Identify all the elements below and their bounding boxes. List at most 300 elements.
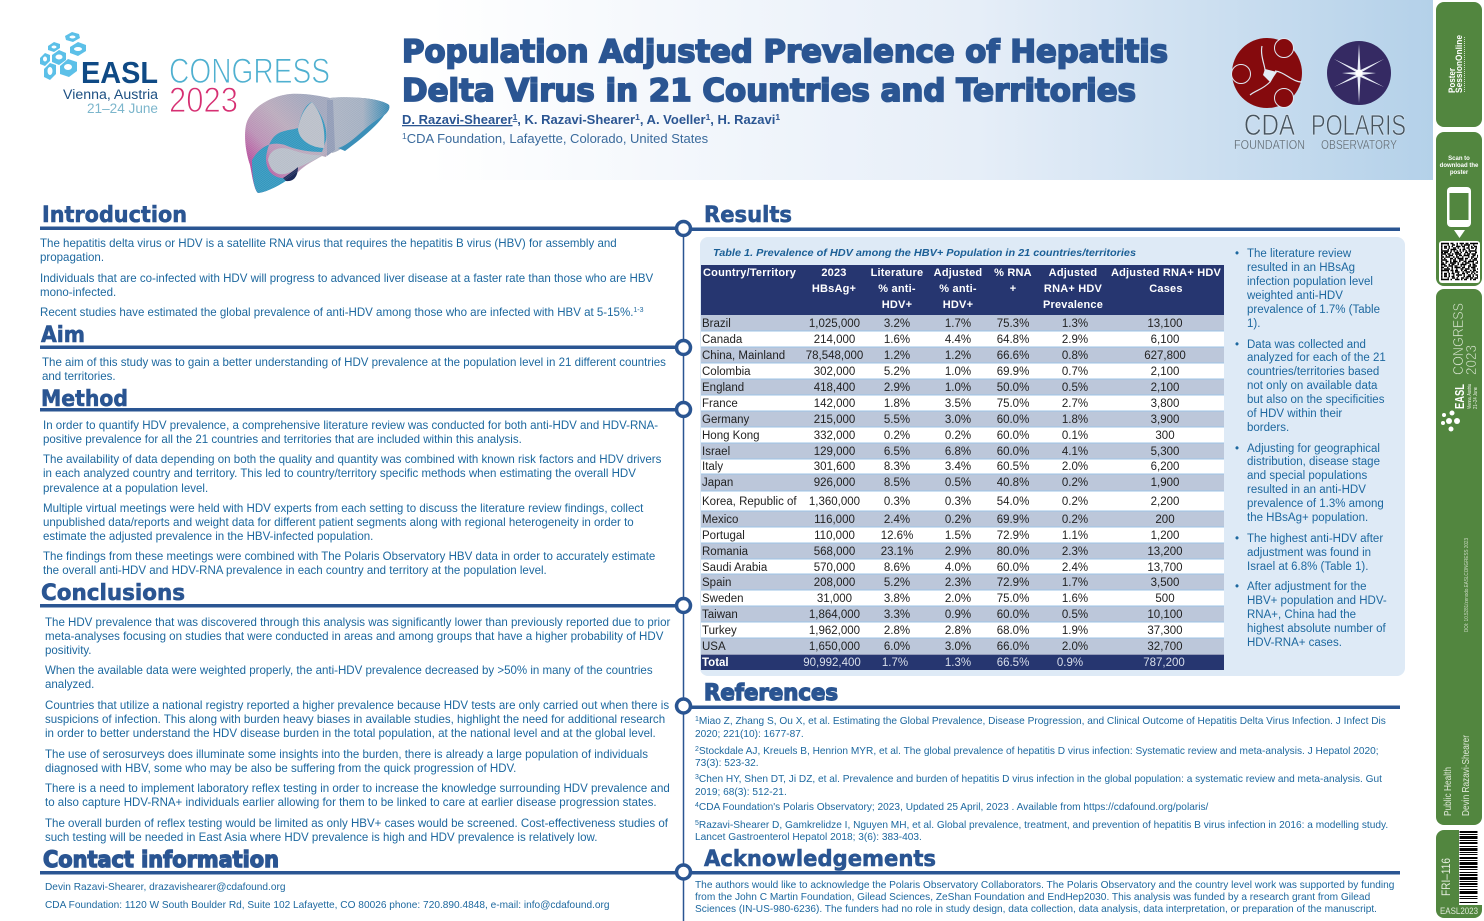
table body: 1.6% <box>1062 593 1088 605</box>
table body: 31,000 <box>817 593 852 605</box>
text block: method: The findings from these meetings were combined with The Polaris Observatory HBV data in order to accurately estimate <box>43 551 655 563</box>
affiliation: 1 <box>402 131 407 141</box>
table body: 110,000 <box>814 530 855 542</box>
table body: 60.0% <box>997 446 1029 458</box>
table body: 2.8% <box>884 625 910 637</box>
table body: 3.2% <box>884 318 910 330</box>
table body: 500 <box>1155 593 1175 605</box>
table body: 2.8% <box>945 625 971 637</box>
table body: 0.9% <box>945 609 971 621</box>
table body: 0.1% <box>1062 430 1088 442</box>
table body: 1.8% <box>1062 414 1088 426</box>
icon: liver illustration <box>245 94 389 193</box>
table body: 66.0% <box>997 641 1029 653</box>
table body: 3.0% <box>945 641 971 653</box>
table body: 3,800 <box>1151 398 1179 410</box>
heading: References: References <box>704 681 838 706</box>
sidebar: EASL Congress, track and presenter: Devin Razavi-Shearer <box>1461 734 1472 816</box>
panel: method <box>40 387 676 577</box>
table body: England <box>702 382 744 394</box>
table body: 2.9% <box>945 546 971 558</box>
text block: references: Lancet Gastroenterol Hepatol 2018; 3(6): 383-403. <box>695 832 922 843</box>
table body: 12.6% <box>881 530 913 542</box>
text block: references: 1 <box>695 716 699 723</box>
table body: 10,100 <box>1147 609 1183 621</box>
results key points: • <box>1235 443 1239 455</box>
sidebar: EASL Congress, track and presenter: 21–24 June <box>1473 387 1479 409</box>
table header: HDV+ <box>943 299 973 311</box>
panel: acknowledgements <box>690 847 1400 915</box>
table body: 1.2% <box>884 350 910 362</box>
table total row: 0.9% <box>1057 657 1083 669</box>
table body: 60.0% <box>997 430 1029 442</box>
table body: 568,000 <box>814 546 855 558</box>
title: Delta Virus in 21 Countries and Territories <box>402 73 1136 109</box>
table body: 3,500 <box>1151 577 1179 589</box>
heading: Results: Results <box>704 203 792 228</box>
table body: 1.8% <box>884 398 910 410</box>
header band <box>0 0 1433 180</box>
heading: Contact information: Contact information <box>43 848 279 873</box>
table body: 68.0% <box>997 625 1029 637</box>
results key points: infection population level <box>1247 276 1373 288</box>
logo: Polaris Observatory: OBSERVATORY <box>1321 138 1398 152</box>
table body: 4.0% <box>945 562 971 574</box>
results key points: Adjusting for geographical <box>1247 443 1380 455</box>
table body: 142,000 <box>814 398 855 410</box>
table body: 0.2% <box>1062 477 1088 489</box>
results key points: • <box>1235 248 1239 260</box>
table total row: Total <box>702 657 729 669</box>
table header: Country/Territory <box>703 267 797 279</box>
table body: 1,900 <box>1151 477 1179 489</box>
table body: 60.0% <box>997 414 1029 426</box>
table body: 1.0% <box>945 382 971 394</box>
table body: 1.6% <box>884 334 910 346</box>
table body: 6,200 <box>1151 461 1179 473</box>
text block: conclusions: meta-analyses focusing on studies that were conducted in areas and among groups that have a higher probability of HDV <box>45 631 664 643</box>
logo: Polaris Observatory: POLARIS <box>1311 110 1406 142</box>
table body: 64.8% <box>997 334 1029 346</box>
text block: references: Miao Z, Zhang S, Ou X, et al. Estimating the Global Prevalence, Disease Progression, and Clinical Outcome of Hepatitis Delta Virus Infection. J Infect Dis <box>699 716 1386 727</box>
text block: references: 2020; 221(10): 1677-87. <box>695 729 804 740</box>
text block: method: prevalence at a population level. <box>43 483 208 495</box>
results key points: • <box>1235 339 1239 351</box>
table body: 75.0% <box>997 398 1029 410</box>
table caption: Table 1. Prevalence of HDV among the HBV+ Population in 21 countries/territories <box>713 247 1136 259</box>
heading: Acknowledgements: Acknowledgements <box>704 847 936 872</box>
table body: 1.7% <box>945 318 971 330</box>
table total row: 787,200 <box>1143 657 1185 669</box>
table body: 5.2% <box>884 577 910 589</box>
table body: 1,200 <box>1151 530 1179 542</box>
table body: 3.8% <box>884 593 910 605</box>
panel: aim <box>40 323 676 383</box>
sidebar: EASL Congress, track and presenter: Public Health <box>1443 767 1454 816</box>
table body: 418,400 <box>814 382 855 394</box>
sidebar: EASL Congress, track and presenter: DOI: 10.5281/zenodo.EASLCONGRESS 2023 <box>1464 538 1470 632</box>
table body: 78,548,000 <box>806 350 863 362</box>
table body: 60.5% <box>997 461 1029 473</box>
authors: 1 <box>706 112 711 122</box>
text block: references: Stockdale AJ, Kreuels B, Henrion MYR, et al. The global prevalence of hepatitis D virus infection: Systematic review and meta-analysis. J Hepatol 2020; <box>699 746 1379 757</box>
title <box>402 34 1168 109</box>
logo: Polaris Observatory <box>1311 41 1406 152</box>
text block: conclusions: in order to better understand the HDV disease burden in the total population, at the national level and at the global level. <box>45 728 656 740</box>
table body: 6.5% <box>884 446 910 458</box>
sidebar: QR download: download the <box>1440 163 1479 169</box>
table row stripes <box>701 315 1224 669</box>
logo: EASL Congress: 21–24 June <box>87 101 158 116</box>
results key points: weighted anti-HDV <box>1246 290 1343 302</box>
table header: Adjusted <box>1049 267 1097 279</box>
results key points: borders. <box>1247 422 1289 434</box>
table body: 0.3% <box>884 496 910 508</box>
table body: 69.9% <box>997 514 1029 526</box>
sidebar: poster number and barcode <box>1436 830 1482 918</box>
table header: HBsAg+ <box>812 283 856 295</box>
text block: introduction: 1-3 <box>633 307 644 314</box>
table body: 570,000 <box>814 562 855 574</box>
text block: references: 5 <box>695 820 699 827</box>
table body: 3.3% <box>884 609 910 621</box>
logo: EASL Congress: EASL <box>81 55 158 90</box>
text block: introduction: mono-infected. <box>40 287 116 299</box>
table body: Portugal <box>702 530 745 542</box>
table body: 0.5% <box>1062 609 1088 621</box>
logo: CDA Foundation <box>1232 38 1305 152</box>
table body: 332,000 <box>814 430 855 442</box>
text block: method: unpublished data/reports and weight data for different patient segments along with regional heterogeneity in order to <box>43 517 634 529</box>
table body: 5.2% <box>884 366 910 378</box>
heading: Method: Method <box>41 387 128 412</box>
table body: 0.2% <box>884 430 910 442</box>
table body: 23.1% <box>881 546 913 558</box>
text block: introduction: Individuals that are co-infected with HDV will progress to advanced liver disease at a faster rate than those who are HBV <box>40 273 654 285</box>
text block: aim <box>42 357 666 383</box>
table body: 2.0% <box>945 593 971 605</box>
table body: 2.0% <box>1062 641 1088 653</box>
panel: conclusions <box>40 581 676 844</box>
text block: aim: and territories. <box>42 371 116 383</box>
table body: 50.0% <box>997 382 1029 394</box>
table body: 60.0% <box>997 562 1029 574</box>
table body: 5,300 <box>1151 446 1179 458</box>
table body: 13,200 <box>1147 546 1183 558</box>
table body: Colombia <box>702 366 751 378</box>
table body: 8.5% <box>884 477 910 489</box>
table body: Brazil <box>702 318 731 330</box>
table body: 200 <box>1155 514 1175 526</box>
table body: 0.2% <box>1062 496 1088 508</box>
table body: Japan <box>702 477 733 489</box>
authors: D. Razavi-Shearer <box>402 112 518 127</box>
text block: references: CDA Foundation's Polaris Observatory; 2023, Updated 25 April, 2023 . Available from https://cdafound.org/polaris/ <box>699 802 1209 813</box>
table body: 75.3% <box>997 318 1029 330</box>
table body: 1,650,000 <box>809 641 860 653</box>
table body: 13,100 <box>1147 318 1183 330</box>
table body: 37,300 <box>1147 625 1183 637</box>
text block: conclusions: suspicions of infection. This along with burden heavy biases in available studies, highlight the need for additional research <box>45 714 665 726</box>
text block: method: the overall anti-HDV and HDV-RNA prevalence in each country and territory at the population level. <box>43 565 547 577</box>
table body: 0.2% <box>1062 514 1088 526</box>
text block: method: In order to quantify HDV prevalence, a comprehensive literature review was conducted for both anti-HDV and HDV-RNA- <box>43 420 658 432</box>
table header: + <box>1010 283 1016 295</box>
panel: introduction <box>40 203 676 319</box>
text block: conclusions <box>45 617 671 844</box>
text block: introduction: propagation. <box>40 252 104 264</box>
table body: 3.5% <box>945 398 971 410</box>
table body: 4.4% <box>945 334 971 346</box>
text block: conclusions: The use of serosurveys does illuminate some insights into the burden, there is already a large population of individuals <box>45 749 648 761</box>
table body: Spain <box>702 577 731 589</box>
text block: references: 2 <box>695 746 699 753</box>
sidebar: Poster Session Online <box>1436 2 1482 127</box>
table body: 0.2% <box>945 514 971 526</box>
table body: 2,100 <box>1151 366 1179 378</box>
logo: EASL Congress: CONGRESS <box>169 52 330 91</box>
table body: Hong Kong <box>702 430 760 442</box>
table body: 1.1% <box>1062 530 1088 542</box>
results key points: 1). <box>1247 318 1260 330</box>
table body: 1.7% <box>1062 577 1088 589</box>
sidebar: QR download: Scan to <box>1448 156 1470 162</box>
text block: references: Chen HY, Shen DT, Ji DZ, et al. Prevalence and burden of hepatitis D virus infection in the global population: a systematic review and meta-analysis. Gut <box>699 774 1382 785</box>
table body <box>702 318 1186 653</box>
table body: 0.8% <box>1062 350 1088 362</box>
table: HDV prevalence <box>701 265 1224 670</box>
text block: references: 3 <box>695 774 699 781</box>
icon: sidebar hexagons <box>1441 410 1460 432</box>
table body: Mexico <box>702 514 738 526</box>
results key points: • <box>1235 581 1239 593</box>
table body: Romania <box>702 546 749 558</box>
table body: 0.2% <box>945 430 971 442</box>
authors: , H. Razavi <box>710 112 775 127</box>
text block: acknowledgements: Sciences (IN-US-980-6236). The funders had no role in study design, data collection, data analysis, data interpretation, or preparation of the manuscript. <box>695 904 1377 915</box>
barcode <box>1459 830 1482 905</box>
QR code <box>1439 241 1480 283</box>
table body: 0.5% <box>1062 382 1088 394</box>
panel: references <box>690 681 1400 843</box>
table body: 40.8% <box>997 477 1029 489</box>
text block: method: positive prevalence for all the 21 countries and territories that are included within this analysis. <box>43 434 522 446</box>
results key points: After adjustment for the <box>1247 581 1367 593</box>
results key points: • <box>1235 533 1239 545</box>
authors: 1 <box>775 112 780 122</box>
affiliation: CDA Foundation, Lafayette, Colorado, United States <box>407 131 709 146</box>
table header: % anti- <box>939 283 977 295</box>
table body: 1.5% <box>945 530 971 542</box>
table body: 2.4% <box>884 514 910 526</box>
table body: 6.8% <box>945 446 971 458</box>
results background <box>700 237 1405 676</box>
panel: contact information <box>40 848 676 911</box>
results key points: RNA+, China had the <box>1247 609 1356 621</box>
text block: introduction: The hepatitis delta virus or HDV is a satellite RNA virus that requires the hepatitis B virus (HBV) for assembly and <box>40 238 617 250</box>
table body: 0.5% <box>945 477 971 489</box>
results key points: of HDV within their <box>1247 408 1342 420</box>
table body: 215,000 <box>814 414 855 426</box>
logo: EASL Congress: Vienna, Austria <box>63 87 159 102</box>
table body: 69.9% <box>997 366 1029 378</box>
table header: Literature <box>871 267 923 279</box>
text block: conclusions: analyzed. <box>45 679 94 691</box>
results key points: highest absolute number of <box>1247 623 1387 635</box>
logo: EASL Congress <box>40 32 330 120</box>
sidebar: QR download <box>1436 132 1482 286</box>
results key points: not only on available data <box>1247 380 1378 392</box>
sidebar: EASL Congress, track and presenter: 2023 <box>1463 345 1480 375</box>
icon: phone <box>1447 187 1471 227</box>
text block: conclusions: When the available data were weighted properly, the anti-HDV prevalence decreased by >50% in many of the countries <box>45 665 653 677</box>
sidebar: EASL Congress, track and presenter: Vienna, Austria <box>1467 383 1473 409</box>
sidebar: poster number and barcode: FRI–116 <box>1439 858 1453 896</box>
results key points: resulted in an HBsAg <box>1247 262 1355 274</box>
text block: method: Multiple virtual meetings were held with HDV experts from each setting to discuss the literature review findings, collect <box>43 503 644 515</box>
table body: 3.4% <box>945 461 971 473</box>
text block: acknowledgements: The authors would like to acknowledge the Polaris Observatory Collaborators. The Polaris Observatory and the country level work was supported by funding <box>695 880 1394 891</box>
table body: 1,360,000 <box>809 496 860 508</box>
table total row: 90,992,400 <box>803 657 861 669</box>
table body: Turkey <box>702 625 737 637</box>
text block: conclusions: Countries that utilize a national registry reported a higher prevalence because HDV tests are only carried out when there is <box>45 700 669 712</box>
results key points: adjustment was found in <box>1247 547 1371 559</box>
text block: acknowledgements <box>695 880 1394 915</box>
sidebar: EASL Congress, track and presenter: EASL <box>1452 384 1467 409</box>
table body: 2.9% <box>1062 334 1088 346</box>
title: Population Adjusted Prevalence of Hepatitis <box>402 34 1168 70</box>
results key points: prevalence of 1.7% (Table <box>1247 304 1380 316</box>
results key points: and special populations <box>1247 470 1367 482</box>
table body: 8.6% <box>884 562 910 574</box>
table header: % RNA <box>994 267 1032 279</box>
logo: CDA Foundation: FOUNDATION <box>1234 137 1305 152</box>
table body: 80.0% <box>997 546 1029 558</box>
table body: 1,864,000 <box>809 609 860 621</box>
results key points: countries/territories based <box>1247 366 1379 378</box>
timeline markers <box>676 222 690 879</box>
results key points: the HBsAg+ population. <box>1247 512 1368 524</box>
timeline: vertical connector <box>682 228 684 921</box>
table body: Saudi Arabia <box>702 562 768 574</box>
table total row <box>701 654 1224 670</box>
table body: 208,000 <box>814 577 855 589</box>
table body: 0.3% <box>945 496 971 508</box>
table body: China, Mainland <box>702 350 785 362</box>
table body: 1.0% <box>945 366 971 378</box>
heading: Introduction: Introduction <box>42 203 187 228</box>
logo: EASL Congress: 2023 <box>169 81 238 120</box>
table body: 627,800 <box>1144 350 1186 362</box>
text block: method: in each analyzed country and territory. This led to country/territory specific methods when estimating the overall HDV <box>43 468 636 480</box>
table header: Adjusted <box>934 267 982 279</box>
authors: 1 <box>513 112 518 122</box>
table total row: 1.7% <box>882 657 908 669</box>
results key points: HDV-RNA+ cases. <box>1247 637 1342 649</box>
table body: 2.0% <box>1062 461 1088 473</box>
authors: , K. Razavi-Shearer <box>517 112 635 127</box>
results key points: The highest anti-HDV after <box>1247 533 1383 545</box>
table body: 302,000 <box>814 366 855 378</box>
table body: Italy <box>702 461 723 473</box>
table body: 2.4% <box>1062 562 1088 574</box>
sidebar: Poster Session Online: Poster <box>1447 68 1457 93</box>
table body: 4.1% <box>1062 446 1088 458</box>
table body: 72.9% <box>997 577 1029 589</box>
table header: % anti- <box>878 283 916 295</box>
table body: 116,000 <box>814 514 855 526</box>
results key points: resulted in an anti-HDV <box>1247 484 1366 496</box>
table body: 129,000 <box>814 446 855 458</box>
table body: Canada <box>702 334 743 346</box>
table body: 54.0% <box>997 496 1029 508</box>
table body: 32,700 <box>1147 641 1183 653</box>
text block: method <box>43 420 662 577</box>
panel: results <box>690 203 1405 676</box>
icon: EASL hexagons <box>40 32 86 80</box>
text block: method: estimate the adjusted prevalence in the HBV-infected population. <box>43 531 373 543</box>
text block: references: Razavi-Shearer D, Gamkrelidze I, Nguyen MH, et al. Global prevalence, treatment, and prevention of hepatitis B virus infection in 2016: a modelling study. <box>699 820 1388 831</box>
text block: conclusions: positivity. <box>45 645 92 657</box>
table body: 214,000 <box>814 334 855 346</box>
table body: 1.3% <box>1062 318 1088 330</box>
table body: USA <box>702 641 726 653</box>
heading: Aim: Aim <box>41 323 85 348</box>
table body: 2.9% <box>884 382 910 394</box>
table body: 1.9% <box>1062 625 1088 637</box>
table total row: 1.3% <box>945 657 971 669</box>
text block: conclusions: There is a need to implement laboratory reflex testing in order to increase the knowledge surrounding HDV prevalence and <box>45 783 670 795</box>
text block: references: 4 <box>695 802 699 809</box>
table body: 1,025,000 <box>809 318 860 330</box>
table body: 13,700 <box>1147 562 1183 574</box>
authors: , A. Voeller <box>640 112 706 127</box>
table header: Prevalence <box>1043 299 1103 311</box>
sidebar: EASL Congress, track and presenter: CONGRESS <box>1450 303 1467 375</box>
sidebar: EASL Congress, track and presenter <box>1436 289 1482 825</box>
table body: 2.3% <box>945 577 971 589</box>
table body: 2.7% <box>1062 398 1088 410</box>
text block: introduction: Recent studies have estimated the global prevalence of anti-HDV among those who are infected with HBV at 5-15%. <box>40 307 633 319</box>
table body: 6,100 <box>1151 334 1179 346</box>
table body: France <box>702 398 738 410</box>
table body: 8.3% <box>884 461 910 473</box>
text block: conclusions: The overall burden of reflex testing would be limited as only HBV+ cases would be screened. Cost-effectiveness studies of <box>45 818 669 830</box>
table body: 75.0% <box>997 593 1029 605</box>
table body: Taiwan <box>702 609 738 621</box>
sidebar: Poster Session Online: SessionOnline <box>1454 35 1464 93</box>
results key points: analyzed for each of the 21 <box>1247 352 1386 364</box>
table body: 1.2% <box>945 350 971 362</box>
table total row: 66.5% <box>997 657 1029 669</box>
table body: 926,000 <box>814 477 855 489</box>
table header: Cases <box>1149 283 1183 295</box>
table body: 5.5% <box>884 414 910 426</box>
table body: 300 <box>1155 430 1175 442</box>
text block: references: 2019; 68(3): 512-21. <box>695 787 787 798</box>
results key points: distribution, disease stage <box>1247 456 1380 468</box>
text block: acknowledgements: from the John C Martin Foundation, Gilead Sciences, ZeShan Foundation and EndHep2030. This analysis was funded by a research grant from Gilead <box>695 892 1370 903</box>
results key points: Israel at 6.8% (Table 1). <box>1247 561 1368 573</box>
table header: 2023 <box>821 267 847 279</box>
text block: aim: The aim of this study was to gain a better understanding of HDV prevalence at the population level in 21 different countries <box>42 357 666 369</box>
table body: 3,900 <box>1151 414 1179 426</box>
table body: 301,600 <box>814 461 855 473</box>
results key points <box>1235 248 1387 649</box>
table body: 2.3% <box>1062 546 1088 558</box>
table header: HDV+ <box>882 299 912 311</box>
